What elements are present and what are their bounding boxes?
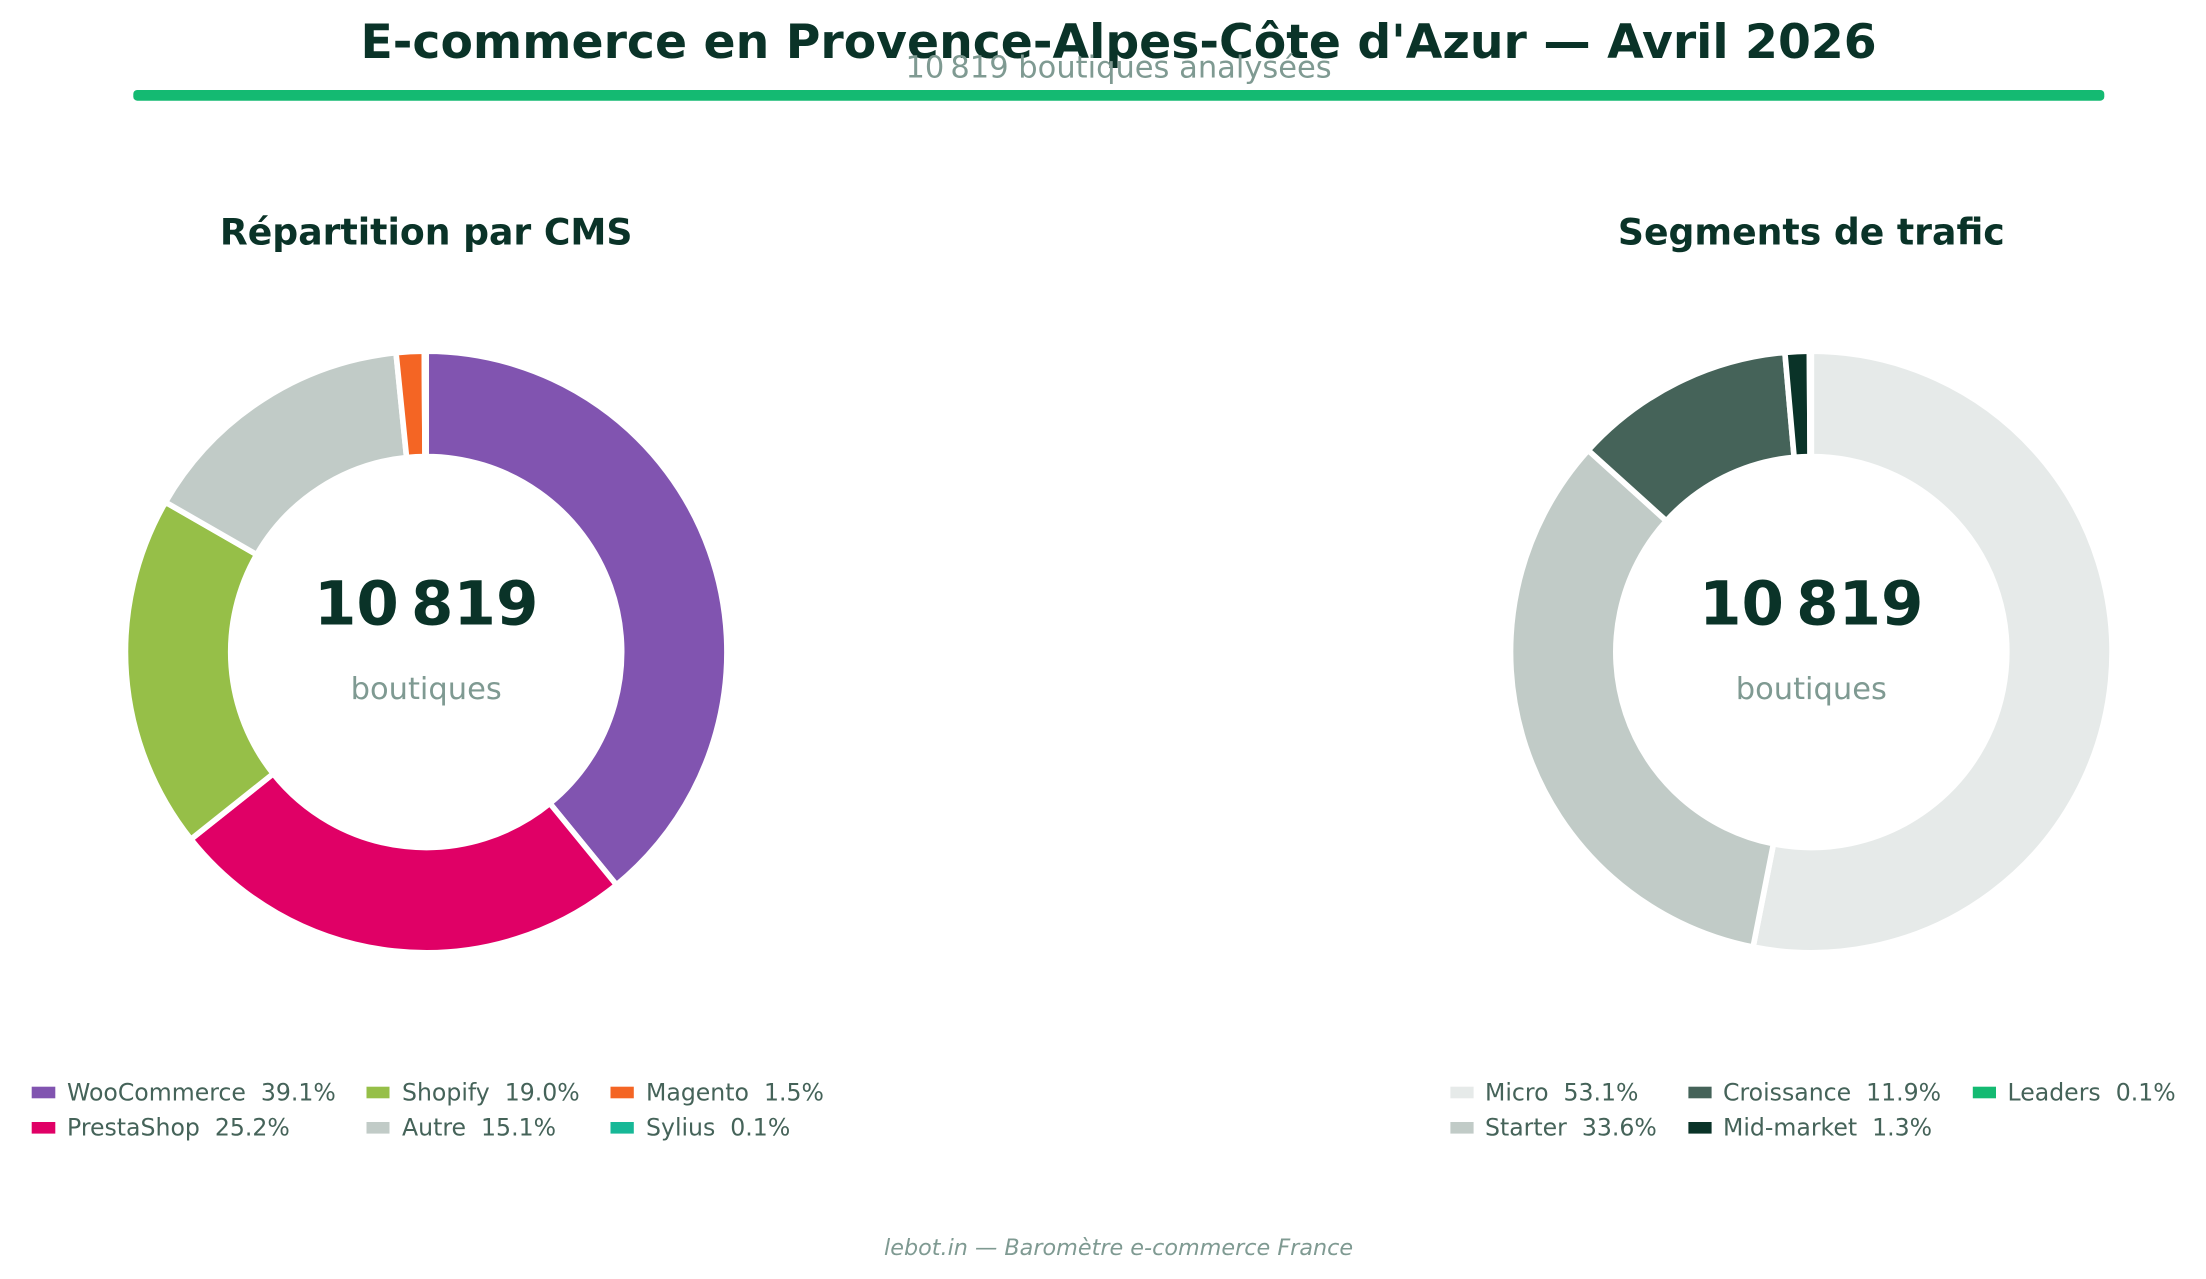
legend item: Croissance: Croissance 11.9% — [1723, 1079, 1941, 1107]
slice: Mid-market 1.3% — [1785, 351, 1810, 457]
donut centre: traffic — [1699, 569, 1924, 707]
unit: boutiques — [351, 672, 502, 707]
title: E-commerce en Provence-Alpes-Côte d'Azur — Avril 2026 — [360, 15, 1877, 70]
slice: Leaders 0.1% — [1809, 351, 1811, 457]
slice: Magento 1.5% — [396, 351, 425, 457]
heading: CMS: Répartition par CMS — [220, 210, 633, 253]
legend item: PrestaShop: PrestaShop 25.2% — [67, 1114, 290, 1142]
legend item: Starter: Starter 33.6% — [1485, 1114, 1657, 1142]
accent bar — [133, 90, 2104, 101]
total: 10 819 — [1699, 569, 1924, 640]
donut centre: CMS — [314, 569, 538, 707]
total: 10 819 — [314, 569, 538, 640]
slice: WooCommerce 39.1% — [426, 351, 727, 885]
donut chart: CMS — [125, 351, 727, 953]
legend item: Sylius: Sylius 0.1% — [646, 1114, 790, 1142]
subtitle: 10 819 boutiques analysées — [906, 50, 1332, 85]
slice: Micro 53.1% — [1753, 351, 2112, 953]
heading: traffic: Segments de trafic — [1618, 210, 2005, 253]
slice: Starter 33.6% — [1511, 450, 1773, 947]
slice: Autre 15.1% — [165, 353, 407, 555]
legend item: Micro: Micro 53.1% — [1485, 1079, 1638, 1107]
legend item: WooCommerce: WooCommerce 39.1% — [67, 1079, 336, 1107]
slice: Shopify 19.0% — [125, 502, 273, 839]
legend item: Magento: Magento 1.5% — [646, 1079, 824, 1107]
slice: PrestaShop 25.2% — [191, 774, 616, 953]
slice: Sylius 0.1% — [424, 351, 426, 457]
legend item: Shopify: Shopify 19.0% — [402, 1079, 580, 1107]
legend item: Autre: Autre 15.1% — [402, 1114, 556, 1142]
slice: Croissance 11.9% — [1588, 352, 1794, 521]
unit: boutiques — [1736, 672, 1887, 707]
donut chart: traffic — [1511, 351, 2112, 953]
legend item: Mid-market: Mid-market 1.3% — [1723, 1114, 1932, 1142]
legend: traffic — [1450, 1079, 2176, 1142]
legend: CMS — [32, 1079, 824, 1142]
footer: lebot.in — Baromètre e-commerce France — [884, 1235, 1353, 1261]
legend item: Leaders: Leaders 0.1% — [2008, 1079, 2176, 1107]
